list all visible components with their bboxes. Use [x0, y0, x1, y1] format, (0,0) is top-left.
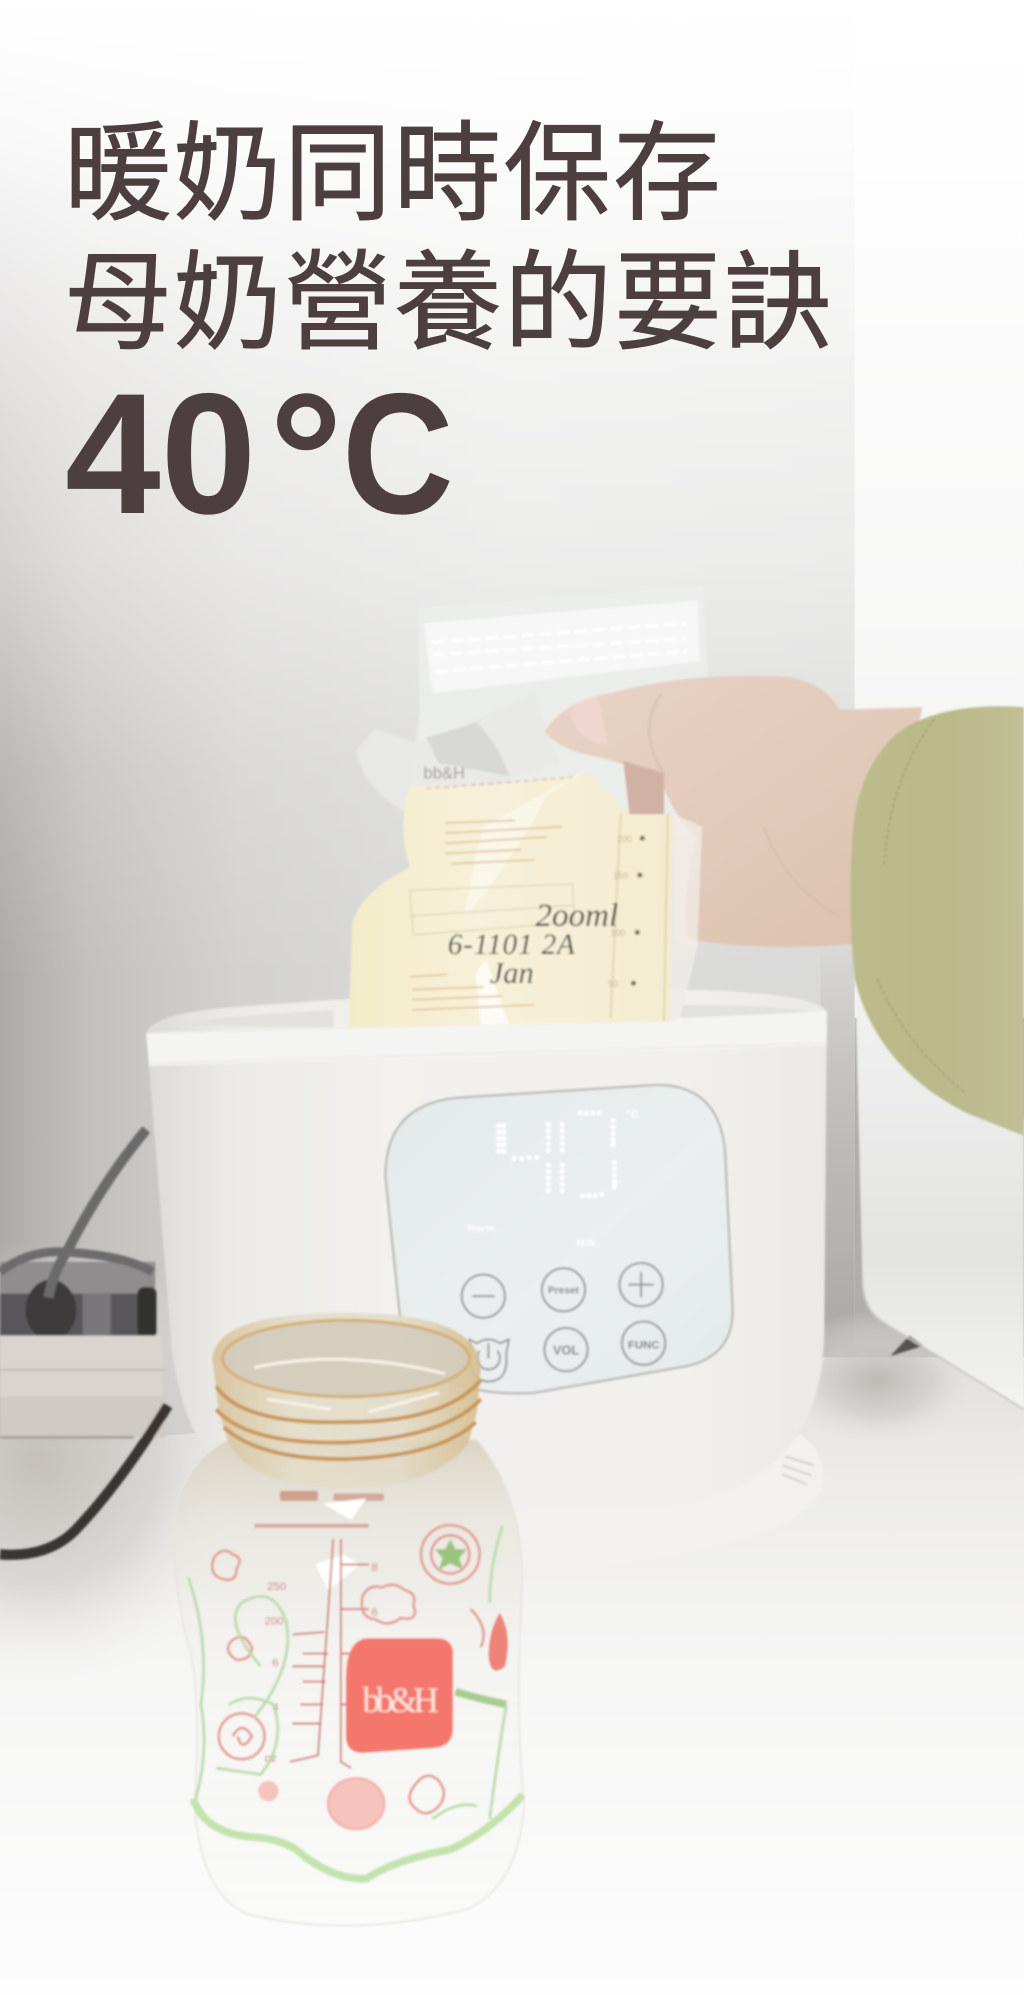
red bud	[488, 1613, 508, 1671]
milk storage bag: 100	[611, 928, 625, 938]
preset button	[542, 1268, 585, 1311]
handwriting: 6-1101 2A	[448, 929, 575, 961]
clear bag top	[407, 585, 709, 840]
hand	[544, 676, 922, 948]
measuring scale	[631, 836, 645, 986]
right white appliance	[855, 967, 1024, 1409]
printed bag instructions	[410, 777, 572, 1010]
cloud flower	[362, 1585, 415, 1623]
raspberry	[328, 1778, 384, 1829]
sleeve	[850, 706, 1024, 1136]
power button	[469, 1339, 509, 1381]
scale numbers: 250	[267, 1581, 286, 1593]
milk storage bag: 150	[613, 871, 628, 881]
control panel	[385, 1085, 733, 1393]
graduated scale	[290, 1539, 369, 1768]
green wavy band	[193, 1795, 523, 1879]
buttons	[462, 1263, 665, 1381]
flower decorations	[212, 1525, 508, 1829]
title line 1: 暖奶同時保存	[64, 113, 721, 234]
scale numbers	[265, 1562, 378, 1765]
function button	[622, 1322, 665, 1365]
flower outline	[410, 1776, 444, 1813]
title line 2: 母奶營養的要訣	[64, 242, 832, 363]
scale numbers: 6	[272, 1657, 279, 1669]
table top	[0, 1240, 1024, 1995]
strawberry circle	[421, 1525, 480, 1584]
warmer inner rim	[165, 1005, 814, 1028]
brand logo	[346, 1638, 453, 1753]
bottle warmer	[146, 990, 827, 1580]
LED labels: °C	[626, 1109, 639, 1121]
handwriting	[448, 898, 618, 990]
feeding bottle	[173, 1313, 524, 1926]
bag film right edge	[670, 814, 702, 1021]
berry dot	[258, 1781, 279, 1801]
swirl	[219, 1713, 265, 1759]
bottle neck	[212, 1313, 481, 1488]
LED temperature 40	[496, 1110, 617, 1198]
minus button	[462, 1275, 505, 1318]
highlights	[315, 1498, 366, 1590]
preset button: Preset	[548, 1286, 580, 1297]
volume button: VOL	[553, 1343, 579, 1358]
scale numbers: 8	[371, 1562, 378, 1574]
power strip and cables	[0, 1130, 168, 1555]
green vines	[188, 1526, 506, 1819]
temperature	[65, 356, 454, 562]
plus button	[619, 1263, 663, 1306]
LED labels: Milk	[576, 1239, 596, 1250]
brand logo: bb&H	[363, 1680, 439, 1720]
small flower left	[212, 1551, 240, 1580]
panel glass	[385, 1085, 733, 1393]
temperature: °	[269, 356, 343, 562]
function button: FUNC	[628, 1339, 660, 1351]
warmer front lip	[146, 1011, 827, 1066]
warmer base	[445, 1435, 823, 1580]
milk storage bag: 50	[608, 979, 618, 989]
temperature: C	[342, 357, 454, 550]
warmer body	[146, 990, 827, 1516]
scale numbers: oz	[265, 1753, 277, 1765]
temperature: 40	[65, 358, 256, 550]
scale numbers: 4	[371, 1651, 378, 1663]
volume button	[544, 1328, 588, 1371]
white reflection	[464, 763, 598, 916]
warmer grille marks	[782, 1456, 814, 1484]
milk	[349, 773, 673, 1028]
neck threads	[216, 1380, 481, 1459]
scale numbers: 4	[272, 1702, 279, 1714]
LED labels: Warm	[467, 1223, 495, 1234]
title	[64, 113, 832, 562]
bag logo: bb&H	[424, 763, 465, 782]
top rim marks	[254, 1491, 384, 1528]
printed bag form table	[410, 884, 575, 935]
handwriting: 2ooml	[536, 898, 618, 934]
milk storage bag: 200	[617, 834, 632, 844]
scale numbers: 6	[371, 1606, 378, 1618]
scale numbers: 200	[265, 1615, 284, 1627]
background wall	[0, 0, 1024, 1526]
LED labels	[467, 1109, 639, 1250]
handwriting: Jan	[490, 956, 534, 990]
milk storage bag	[349, 585, 709, 1028]
bottle body	[173, 1440, 524, 1926]
bag film left flap	[356, 693, 560, 814]
